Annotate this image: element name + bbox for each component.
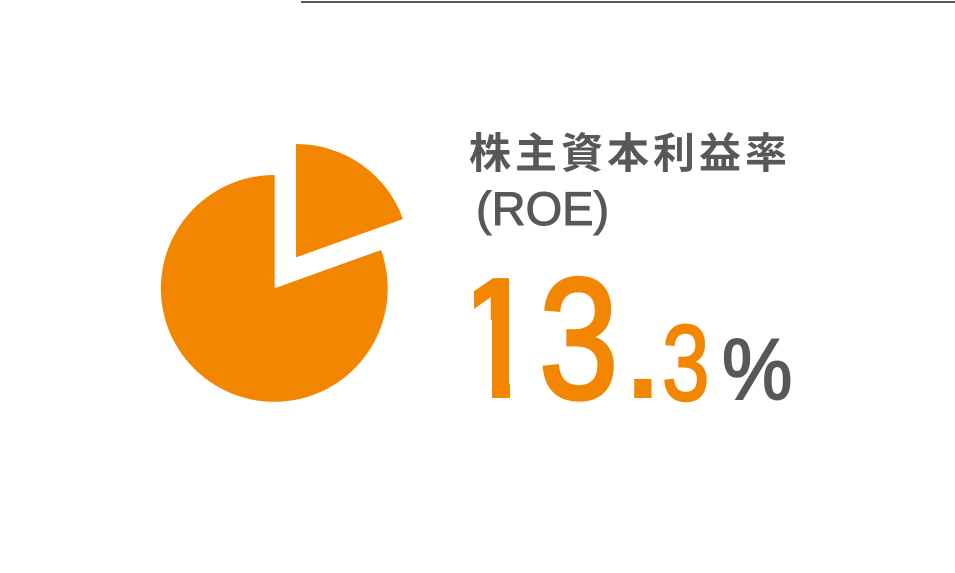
top rule [301, 1, 955, 3]
heading: Japanese: 株主資本利益率 [469, 130, 791, 177]
value digits: 3 [662, 302, 709, 423]
infographic canvas [160, 1, 955, 402]
value digits: . [622, 260, 664, 428]
heading: ROE: (ROE) [476, 182, 609, 235]
value digits: 3 [539, 243, 618, 435]
heading [469, 130, 791, 235]
pie chart [161, 144, 403, 402]
pie detached slice 13.3% [296, 144, 403, 257]
value: 13.3% [474, 276, 790, 402]
pie main slice [161, 175, 388, 402]
percent sign: % [722, 321, 792, 418]
value digits [474, 276, 707, 402]
value digits: 1 [449, 243, 545, 435]
